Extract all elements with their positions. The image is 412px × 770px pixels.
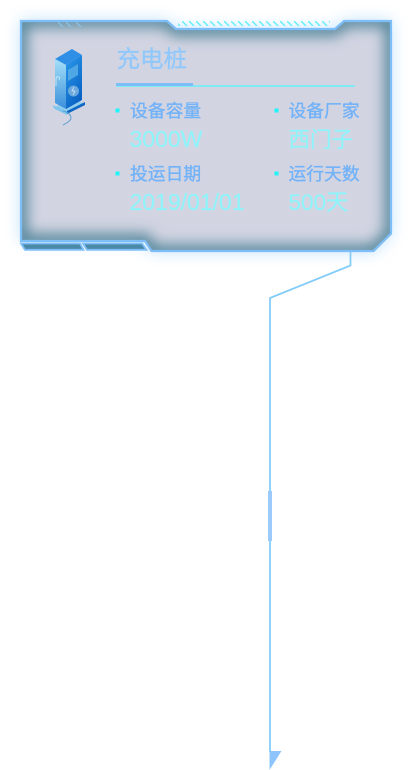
panel border: [21, 21, 391, 251]
field: running days: 运行天数: [288, 164, 360, 184]
arrow head: [270, 751, 282, 770]
field: device capacity: 设备容量: [130, 101, 201, 121]
panel: device card: [20, 20, 392, 252]
field: commissioning date: [116, 164, 245, 215]
top notch hatching: [178, 20, 330, 26]
icon: charging pile: [52, 49, 85, 125]
field: manufacturer: 西门子: [288, 128, 353, 152]
field: manufacturer: 设备厂家: [288, 101, 360, 121]
heading: 充电桩: [116, 46, 187, 72]
title divider: [116, 83, 355, 87]
panel background: [20, 20, 392, 252]
top left ticks: [58, 22, 81, 27]
field: commissioning date: 投运日期: [130, 164, 201, 184]
field: device capacity: 3000W: [130, 126, 203, 152]
field: manufacturer: [274, 101, 360, 152]
bottom tabs: [21, 244, 146, 250]
field: running days: [274, 164, 360, 215]
panel glow: [20, 20, 392, 252]
connector line: [268, 251, 350, 770]
panel inner shadow: [20, 20, 392, 252]
field: commissioning date: 2019/01/01: [130, 189, 245, 215]
field: device capacity: [116, 101, 203, 152]
field: running days: 500天: [288, 190, 349, 215]
line highlight segment: [268, 491, 272, 541]
